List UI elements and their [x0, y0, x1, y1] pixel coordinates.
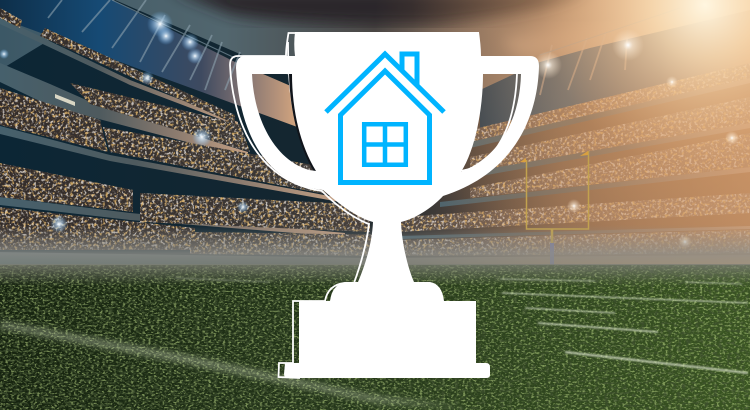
right stadium roof: [480, 10, 750, 128]
house chimney: [402, 54, 417, 85]
panel on the left stand: [55, 94, 75, 106]
warm sunlight from the top right: [0, 0, 750, 280]
trophy cup, handles and base: [236, 32, 539, 378]
icon: house: [326, 54, 444, 182]
house window: [364, 124, 406, 165]
field haze: [0, 225, 750, 266]
crowds in the tiers: [0, 0, 750, 270]
house roof: [326, 54, 444, 112]
trophy shadow outline: [230, 33, 517, 378]
dark strip in the left window: [289, 74, 317, 172]
stadium floodlights: [0, 11, 739, 249]
trophy: [230, 32, 539, 378]
concrete tier edges: [0, 17, 750, 266]
stadium roof: [0, 0, 300, 128]
stand structure: [0, 0, 750, 270]
goal post: [520, 151, 588, 265]
painted field stripes: [0, 278, 748, 408]
warm wash over the right stands: [0, 0, 750, 265]
roof trusses: [48, 0, 680, 95]
sky with clouds: [0, 0, 750, 130]
house body: [340, 71, 430, 182]
grass field: [0, 264, 750, 410]
